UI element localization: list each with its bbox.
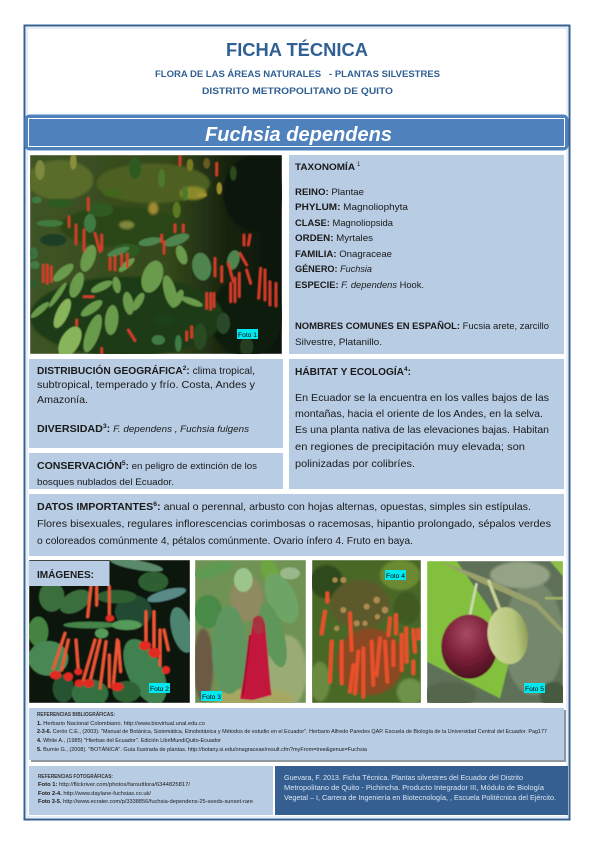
panel: citation: Metropolitano de Quito - Pichincha. Producto Integrador III, Módulo de Biología [284, 783, 545, 792]
photo 5: red and green fruits [423, 561, 567, 708]
photo reference list: Foto 1: http://flickriver.com/photos/farouttlora/6344825817/ [38, 782, 191, 788]
panel: bibliographic references [29, 708, 566, 762]
label: Foto 3: Foto 3 [202, 694, 221, 701]
panel: conservation: CONSERVACIÓN [37, 459, 122, 472]
photo 3: red flowers and large leaf [192, 557, 307, 708]
habitat text: en regiones de precipitación muy elevada; son [295, 442, 525, 453]
panel: geographic distribution and diversity: clima tropical, [193, 366, 255, 377]
references heading: REFERENCIAS BIBLIOGRÁFICAS: [37, 711, 115, 718]
subtitle line 2: DISTRITO METROPOLITANO DE QUITO [202, 86, 393, 96]
photo 4: hanging orange flower cluster [310, 560, 423, 705]
panel: geographic distribution and diversity: Amazonía. [37, 395, 88, 406]
panel: important data: o coloreados comúnmente 4, pétalos comúnmente. Ovario ínfero 4. Fruto en baya. [37, 536, 413, 547]
title: FICHA TÉCNICA [226, 39, 368, 60]
taxonomy heading: TAXONOMÍA [295, 161, 355, 172]
panel: important data: DATOS IMPORTANTES [37, 502, 153, 513]
label: images heading: IMÁGENES: [37, 568, 94, 581]
label: Foto 3 [201, 691, 222, 701]
habitat heading: HÁBITAT Y ECOLOGÍA [295, 367, 405, 378]
taxonomy list: PHYLUM: Magnoliophyta [295, 201, 409, 212]
species name banner [26, 116, 568, 150]
reference list: 1. Herbario Nacional Colombiano. http://www.biovirtual.unal.edu.co [37, 721, 205, 727]
panel: geographic distribution and diversity: 3 [103, 423, 107, 430]
label: Foto 2 [149, 683, 170, 693]
panel: conservation [29, 453, 283, 489]
habitat heading: : [408, 367, 411, 378]
habitat text: polinizadas por colibríes. [295, 459, 415, 470]
panel: conservation: bosques nublados del Ecuador. [37, 476, 174, 487]
label: Foto 2: Foto 2 [150, 686, 169, 693]
panel: important data: 6 [153, 501, 157, 508]
reference list: 4. White A., (1985) "Hierbas del Ecuador". Edición LibriMundiQuito-Ecuador [37, 738, 221, 744]
label: Foto 5 [524, 683, 545, 693]
panel: geographic distribution and diversity: : [107, 424, 110, 435]
label: images heading [28, 561, 110, 586]
habitat text: montañas, hacia el oriente de los Andes, en la selva. [295, 409, 543, 420]
taxonomy list: CLASE: Magnoliopsida [295, 217, 394, 228]
taxonomy list: FAMILIA: Onagraceae [295, 248, 392, 259]
panel: taxonomy [289, 155, 564, 354]
common names: Silvestre, Platanillo. [295, 336, 382, 347]
panel: geographic distribution and diversity [29, 359, 283, 448]
photo reference list [38, 782, 253, 805]
label: Foto 4: Foto 4 [386, 573, 405, 580]
panel: citation: Guevara, F. 2013. Ficha Técnica. Plantas silvestres del Ecuador del Distrito [284, 773, 523, 782]
panel: habitat and ecology [289, 359, 564, 489]
panel: conservation: 5 [122, 460, 126, 467]
panel: important data: anual o perennal, arbusto con hojas alternas, opuestas, simples sin estípulas. [163, 502, 514, 513]
panel: citation [275, 766, 568, 815]
photo reference list: Foto 3-5. http://www.ecrater.com/p/3338856/fuchsia-dependens-25-seeds-sunset-rare [38, 799, 253, 805]
panel: conservation: en peligro de extinción de los [132, 460, 253, 471]
photo references heading: REFERENCIAS FOTOGRÁFICAS: [38, 773, 113, 780]
panel: conservation: : [126, 460, 129, 471]
photo reference list: Foto 2-4. http://www.daylane-fuchsias.co.uk/ [38, 791, 152, 797]
taxonomy list [295, 186, 424, 290]
habitat heading: 4 [404, 366, 408, 373]
species name: Fuchsia dependens [205, 124, 392, 146]
panel: photo references [29, 766, 273, 815]
panel: geographic distribution and diversity: DISTRIBUCIÓN GEOGRÁFICA [37, 364, 183, 377]
header: title block [155, 39, 440, 96]
panel: geographic distribution and diversity: F. dependens , Fuchsia fulgens [113, 423, 249, 434]
taxonomy list: ORDEN: Myrtales [295, 232, 373, 243]
panel: important data: Flores bisexuales, regulares inflorescencias corimbosas o racemosas, hipantio prolongado, sépalos verdes [37, 519, 551, 530]
footnote mark: 1 [357, 162, 361, 168]
common names: NOMBRES COMUNES EN ESPAÑOL: Fucsia arete, zarcillo [295, 320, 549, 331]
panel: geographic distribution and diversity: : [186, 366, 190, 377]
taxonomy list: REINO: Plantae [295, 186, 364, 197]
panel: important data [29, 494, 564, 556]
common names [295, 320, 549, 347]
panel: important data: : [157, 502, 161, 513]
label: Foto 1: Foto 1 [238, 332, 257, 339]
photo 1: flowering shrub [27, 154, 283, 361]
reference list: 5. Burnie G., (2008). "BOTÁNICA". Guía Ilustrada de plantas. http://botany.si.edu/onagraceae/result.cfm?myFrom=tree&genus=Fuchsia [37, 746, 367, 753]
panel: citation: Vegetal – I, Carrera de Ingeniería en Biotecnología, , Escuela Politécnica del Ejército. [284, 793, 556, 802]
photo 2: red tubular flowers on dark background [29, 560, 190, 703]
panel: geographic distribution and diversity: DIVERSIDAD [37, 424, 103, 435]
label: Foto 1 [237, 329, 258, 339]
reference list [37, 721, 547, 753]
habitat text [295, 393, 549, 470]
taxonomy list: ESPECIE: F. dependens Hook. [295, 279, 424, 290]
taxonomy list: GÉNERO: Fuchsia [295, 263, 372, 274]
panel: geographic distribution and diversity: 2 [183, 365, 187, 372]
subtitle line 1: FLORA DE LAS ÁREAS NATURALES - PLANTAS SILVESTRES [155, 68, 440, 79]
reference list: 2-3-6. Cerón C.E., (2003). "Manual de Botánica, Sistemática, Etnobotánica y Métodos de estudio en el Ecuador". Herbario Alfredo Paredes QAP. Escuela de Biología de la Universidad Central del Ecuador. Pag177 [37, 729, 547, 735]
label: Foto 5: Foto 5 [525, 686, 544, 693]
habitat text: Es una planta nativa de las elevaciones bajas. Habitan [295, 425, 549, 436]
label: Foto 4 [385, 570, 406, 580]
panel: geographic distribution and diversity: subtropical, temperado y frío. Costa, Andes y [37, 380, 256, 391]
habitat text: En Ecuador se la encuentra en los valles bajos de las [295, 393, 549, 404]
